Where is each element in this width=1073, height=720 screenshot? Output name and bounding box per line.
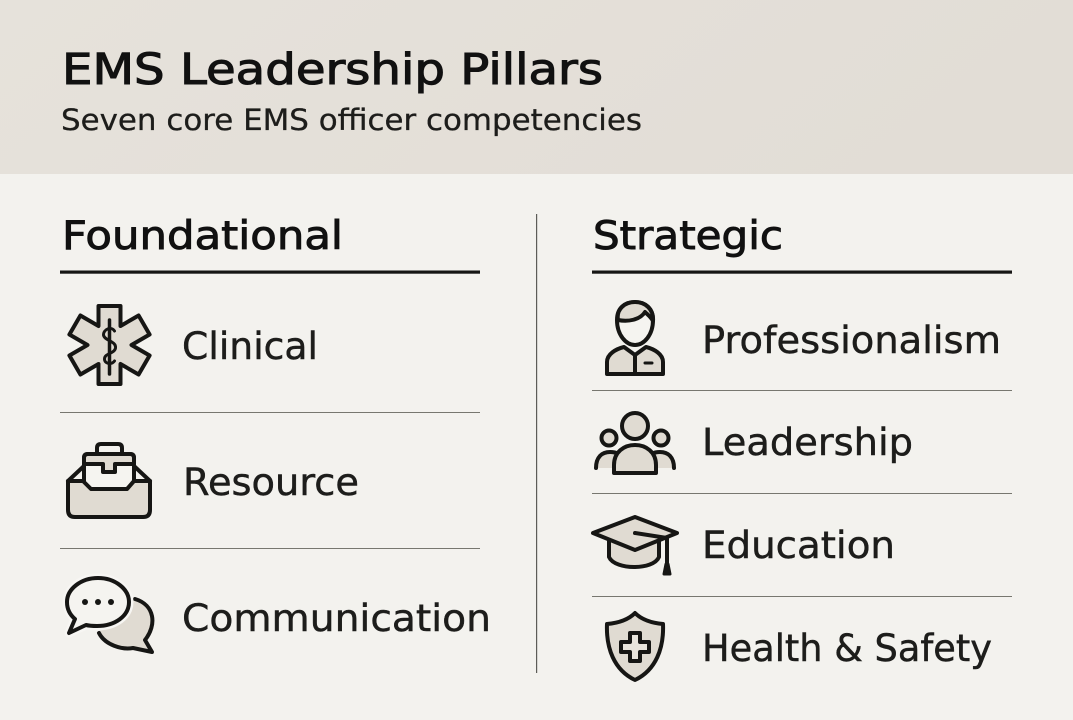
icon: shield with cross xyxy=(607,613,663,680)
heading: foundational: Foundational xyxy=(62,214,343,259)
title: EMS Leadership Pillars xyxy=(62,45,603,95)
label: health and safety: Health & Safety xyxy=(702,627,992,670)
subtitle: Seven core EMS officer competencies xyxy=(61,103,642,137)
label: professionalism: Professionalism xyxy=(702,319,1001,362)
center divider xyxy=(536,214,537,673)
icon: toolbox tray xyxy=(68,444,150,517)
label: communication: Communication xyxy=(182,597,491,640)
label: clinical: Clinical xyxy=(182,325,318,368)
icon: people group xyxy=(596,413,674,473)
icon: star of life xyxy=(69,306,150,384)
icon: person xyxy=(607,302,663,374)
icon: speech bubbles xyxy=(67,578,152,652)
heading: strategic: Strategic xyxy=(593,214,783,259)
label: leadership: Leadership xyxy=(702,421,913,464)
header band xyxy=(0,0,1073,174)
label: education: Education xyxy=(702,524,895,567)
icon: graduation cap xyxy=(593,517,677,574)
label: resource: Resource xyxy=(183,461,359,504)
panel: foundational xyxy=(60,214,491,652)
panel: strategic xyxy=(592,214,1012,680)
